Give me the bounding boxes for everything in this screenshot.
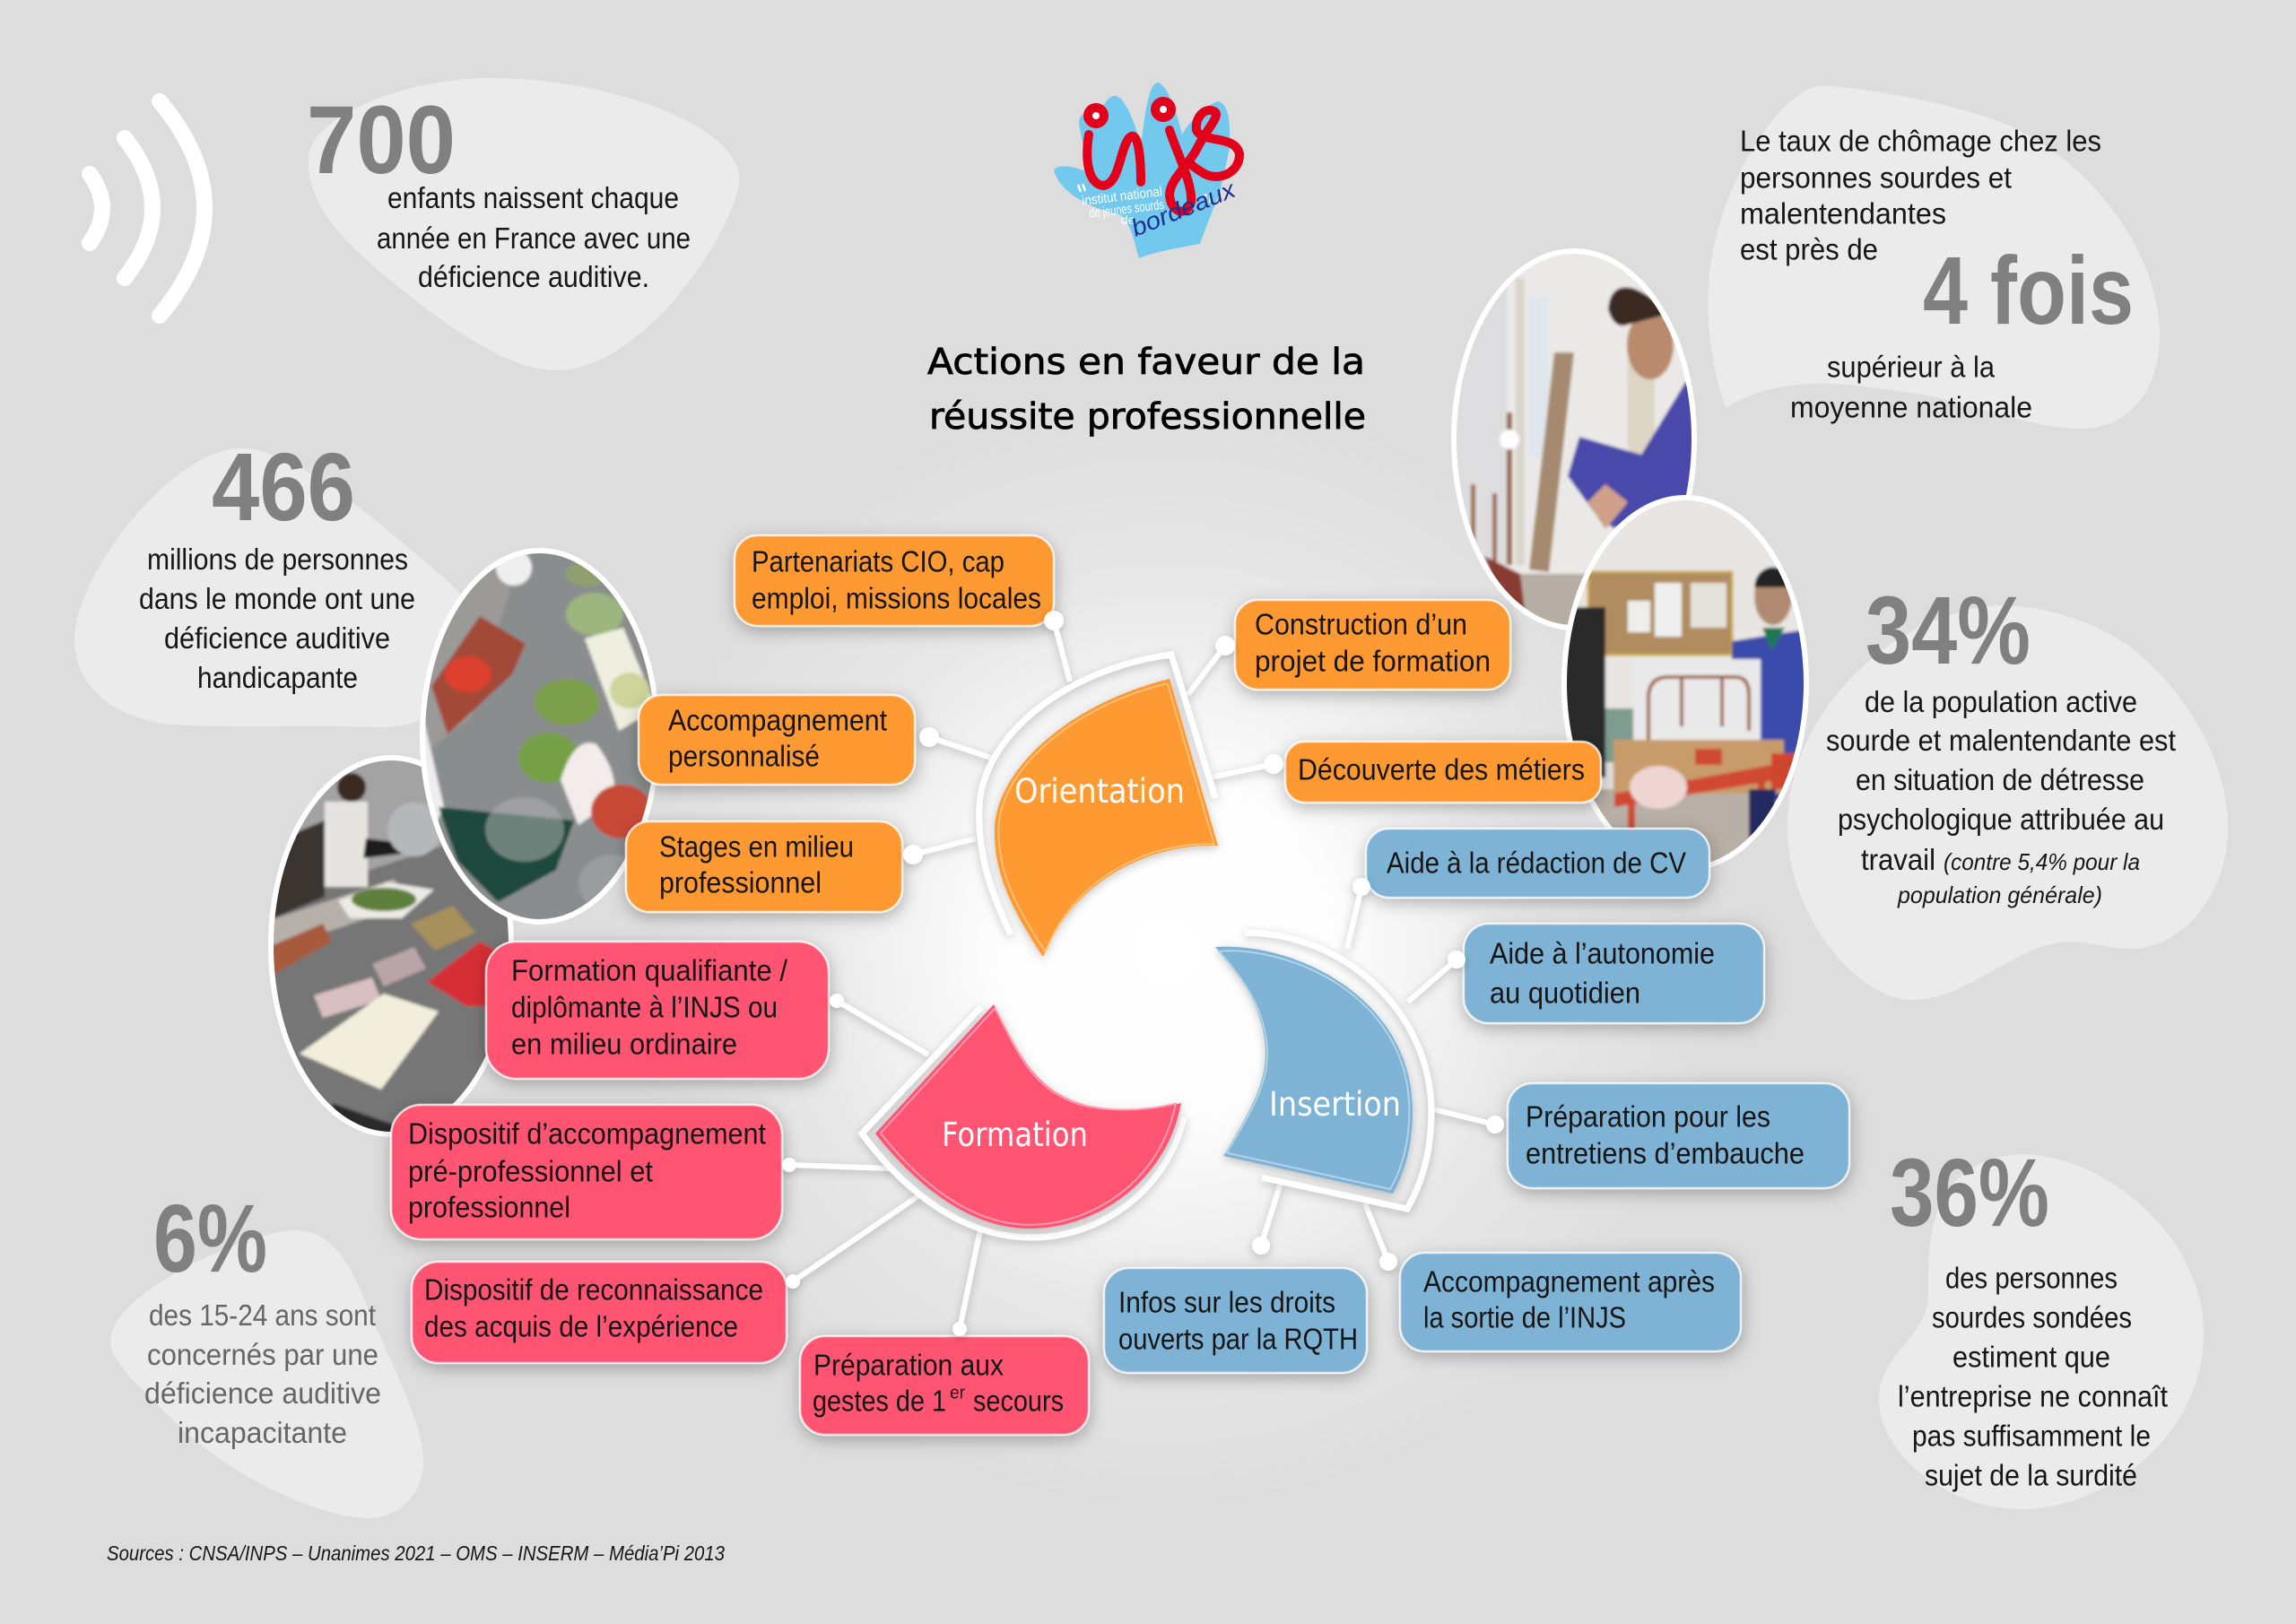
panel: 466 millions: handicapante bbox=[197, 661, 358, 694]
panel: 34%: psychologique attribuée au bbox=[1838, 803, 2164, 836]
box: Préparation secours: er bbox=[950, 1383, 965, 1403]
box: Dispositif accompagnement: pré-professionnel et bbox=[408, 1155, 653, 1187]
connectors: formation bbox=[782, 994, 980, 1336]
panel: 700 enfants: 700 bbox=[307, 85, 456, 194]
box: Accompagnement après: Accompagnement après bbox=[1423, 1264, 1715, 1298]
panel: 36% bbox=[1879, 1138, 2204, 1509]
box: Formation qualifiante: en milieu ordinaire bbox=[511, 1028, 737, 1060]
central radial glow bbox=[538, 377, 1794, 1524]
panel: 466 millions: dans le monde ont une bbox=[139, 582, 415, 615]
box: Accompagnement après bbox=[1400, 1253, 1741, 1351]
panel: 4 fois bbox=[1708, 85, 2160, 429]
photo: salad preparation bbox=[420, 548, 657, 925]
box: Partenariats: Partenariats CIO, cap bbox=[752, 545, 1004, 578]
logo: white institution text: de jeunes sourds bbox=[1088, 197, 1165, 221]
logo: white institution text bbox=[1078, 184, 1211, 227]
photo: kitchen counter bbox=[260, 749, 520, 1143]
logo: red lettering bbox=[1087, 101, 1239, 212]
panel: 34% bbox=[1787, 576, 2228, 1000]
panel: 466 millions: 466 bbox=[212, 432, 355, 541]
sources: Sources : CNSA/INPS – Unanimes 2021 – OMS – INSERM – Média’Pi 2013 bbox=[107, 1541, 725, 1565]
title: Actions en faveur de la bbox=[927, 342, 1365, 383]
box: Préparation secours: gestes de 1 bbox=[813, 1385, 946, 1417]
box: Construction: projet de formation bbox=[1255, 644, 1491, 678]
box: Partenariats: emploi, missions locales bbox=[752, 581, 1041, 615]
box: Accompagnement après: la sortie de l’INJS bbox=[1423, 1300, 1626, 1334]
panel: 466 millions: déficience auditive bbox=[164, 621, 390, 655]
panel: 4 fois: 4 fois bbox=[1923, 236, 2134, 344]
box: Découverte bbox=[1285, 742, 1601, 803]
box: Formation qualifiante: Formation qualifiante / bbox=[511, 954, 788, 986]
panel: 6%: des 15-24 ans sont bbox=[149, 1298, 376, 1332]
panel: 700 enfants bbox=[307, 78, 739, 370]
box: Dispositif reconnaissance: Dispositif de reconnaissance bbox=[424, 1273, 763, 1306]
title: réussite professionnelle bbox=[929, 396, 1366, 438]
box: Préparation secours bbox=[800, 1336, 1089, 1435]
panel: 34%: (contre 5,4% pour la bbox=[1944, 848, 2140, 875]
panel: 34%: 34% bbox=[1866, 576, 2031, 684]
box: Découverte: Découverte des métiers bbox=[1298, 753, 1585, 786]
box: Accompagnement personnalisé: personnalisé bbox=[668, 739, 820, 773]
box: Dispositif accompagnement bbox=[391, 1105, 782, 1239]
panel: 36%: l’entreprise ne connaît bbox=[1898, 1379, 2168, 1413]
panel: 34%: sourde et malentendante est bbox=[1826, 724, 2176, 757]
panel: 4 fois: personnes sourdes et bbox=[1740, 161, 2012, 194]
logo: white institution text: de bbox=[1121, 213, 1135, 227]
box: Aide CV bbox=[1366, 829, 1709, 898]
box: Formation qualifiante: diplômante à l’INJS ou bbox=[511, 990, 778, 1024]
panel: 466 millions bbox=[74, 432, 478, 727]
box: Préparation entretiens: entretiens d’embauche bbox=[1526, 1137, 1805, 1169]
panel: 36%: 36% bbox=[1890, 1138, 2049, 1246]
box: Aide CV: Aide à la rédaction de CV bbox=[1387, 847, 1686, 879]
box: Préparation entretiens: Préparation pour les bbox=[1526, 1099, 1770, 1133]
box: Aide autonomie: au quotidien bbox=[1490, 976, 1640, 1010]
panel: 6% bbox=[110, 1184, 423, 1518]
panel: 34%: en situation de détresse bbox=[1856, 763, 2144, 796]
box: Stages: professionnel bbox=[659, 866, 822, 899]
box: Infos RQTH bbox=[1104, 1268, 1367, 1373]
panel: 36%: pas suffisamment le bbox=[1912, 1419, 2151, 1453]
panel: 700 enfants: déficience auditive. bbox=[418, 260, 649, 293]
box: Infos RQTH: ouverts par la RQTH bbox=[1118, 1322, 1358, 1356]
box: Partenariats bbox=[735, 535, 1054, 626]
box: Stages: Stages en milieu bbox=[659, 830, 854, 863]
panel: 36%: des personnes bbox=[1945, 1261, 2118, 1295]
panel: 36%: sourdes sondées bbox=[1932, 1300, 2132, 1334]
icon: sound waves bbox=[90, 101, 204, 316]
box: Construction bbox=[1235, 600, 1510, 690]
panel: 466 millions: millions de personnes bbox=[147, 543, 408, 576]
box: Aide autonomie: Aide à l’autonomie bbox=[1490, 936, 1715, 970]
panel: 36%: sujet de la surdité bbox=[1925, 1458, 2137, 1492]
panel: 34%: de la population active bbox=[1865, 685, 2137, 718]
panel: 6%: incapacitante bbox=[178, 1416, 347, 1449]
panel: 6%: concernés par une bbox=[147, 1338, 378, 1371]
box: Infos RQTH: Infos sur les droits bbox=[1118, 1286, 1335, 1318]
photo: student at workbench bbox=[1556, 489, 1816, 874]
logo: bordeaux script: bordeaux bbox=[1127, 175, 1240, 242]
panel: 6%: déficience auditive bbox=[144, 1376, 381, 1410]
panel: 4 fois: supérieur à la bbox=[1827, 350, 1996, 384]
panel: 4 fois: est près de bbox=[1740, 233, 1878, 265]
segment: Orientation bbox=[979, 655, 1218, 957]
panel: 4 fois: Le taux de chômage chez les bbox=[1740, 124, 2101, 158]
box: Formation qualifiante bbox=[486, 942, 829, 1079]
segment: Formation: Formation bbox=[942, 1116, 1088, 1154]
connectors: insertion bbox=[1252, 878, 1504, 1271]
photo: welding student bbox=[1444, 242, 1704, 637]
segment: Insertion: Insertion bbox=[1269, 1085, 1401, 1124]
box: Préparation entretiens bbox=[1508, 1083, 1849, 1188]
panel: 4 fois: malentendantes bbox=[1740, 197, 1946, 230]
segment: Formation bbox=[862, 1004, 1184, 1238]
box: Dispositif reconnaissance: des acquis de l’expérience bbox=[424, 1309, 738, 1343]
box: Préparation secours: secours bbox=[973, 1385, 1064, 1417]
panel: 34%: population générale) bbox=[1897, 881, 2102, 908]
title bbox=[927, 342, 1366, 438]
box: Stages bbox=[626, 821, 902, 912]
panel: 6%: 6% bbox=[153, 1184, 267, 1292]
panel: 34%: travail bbox=[1861, 843, 1935, 876]
box: Accompagnement personnalisé bbox=[639, 695, 915, 785]
segment: Insertion bbox=[1215, 933, 1431, 1209]
box: Dispositif accompagnement: professionnel bbox=[408, 1191, 570, 1223]
box: Aide autonomie bbox=[1464, 924, 1764, 1023]
box: Dispositif accompagnement: Dispositif d’accompagnement bbox=[408, 1117, 766, 1150]
segment: Orientation: Orientation bbox=[1014, 772, 1185, 811]
panel: 700 enfants: enfants naissent chaque bbox=[387, 181, 679, 214]
box: Accompagnement personnalisé: Accompagnement bbox=[668, 703, 887, 737]
panel: 700 enfants: année en France avec une bbox=[377, 221, 691, 255]
box: Dispositif reconnaissance bbox=[412, 1262, 787, 1363]
panel: 36%: estiment que bbox=[1952, 1340, 2110, 1374]
connectors: orientation bbox=[903, 611, 1283, 864]
panel: 4 fois: moyenne nationale bbox=[1790, 391, 2032, 423]
logo: INJS Bordeaux hand bbox=[1054, 83, 1240, 258]
box: Construction: Construction d’un bbox=[1255, 608, 1467, 640]
box: Préparation secours: Préparation aux bbox=[813, 1349, 1004, 1381]
logo: white institution text: institut national bbox=[1081, 184, 1163, 209]
